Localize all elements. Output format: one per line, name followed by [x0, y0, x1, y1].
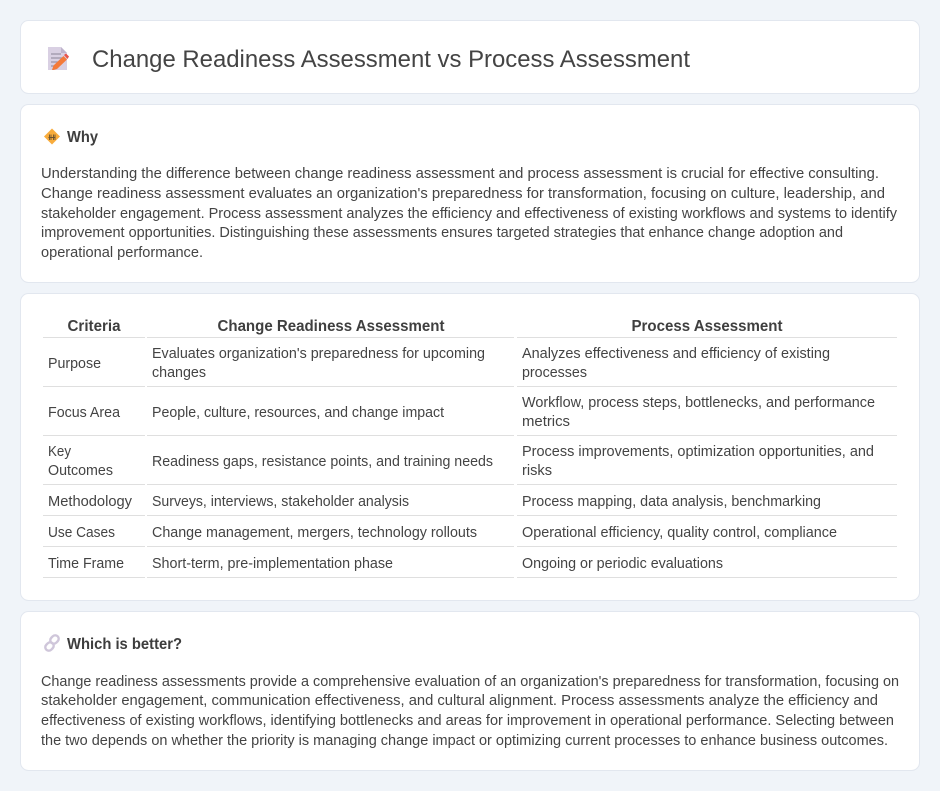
row: use cases [43, 525, 897, 547]
icon: warning diamond [44, 128, 60, 144]
row: purpose: changes [152, 365, 206, 381]
row: purpose: Purpose [48, 356, 101, 372]
row: key outcomes: Process improvements, optimization opportunities, and [522, 444, 874, 460]
table header: Change Readiness Assessment [218, 318, 444, 335]
row: time frame: Short-term, pre-implementation phase [152, 556, 393, 572]
text block: why: stakeholder engagement. Process assessment analyzes the efficiency and effectiveness of existing workflows and systems to identify [41, 206, 898, 222]
row: key outcomes [43, 444, 897, 485]
table header: Criteria [68, 318, 121, 335]
text block: which is better: stakeholder engagement, communication effectiveness, and cultural alignment. Process assessments analyze the efficiency and [41, 693, 878, 709]
row: purpose: Evaluates organization's preparedness for upcoming [152, 346, 485, 362]
row: focus area: metrics [522, 414, 570, 430]
text block: why: Understanding the difference between change readiness assessment and process assessment is crucial for effective consulting. [41, 166, 879, 182]
text block: which is better: the two depends on whether the priority is managing change impact or optimizing current processes to enhance business outcomes. [41, 733, 888, 749]
row: key outcomes: Outcomes [48, 463, 113, 479]
row: time frame [43, 556, 897, 578]
text block: why: operational performance. [41, 245, 203, 261]
row: methodology: Process mapping, data analysis, benchmarking [522, 494, 821, 510]
heading: which is better: Which is better? [67, 636, 182, 653]
text block: why [41, 166, 898, 261]
icon: chain link [44, 634, 60, 652]
panel: comparison table [20, 294, 920, 600]
icon: document with pencil [48, 47, 69, 70]
row: purpose: Analyzes effectiveness and efficiency of existing [522, 346, 830, 362]
row: key outcomes: risks [522, 463, 552, 479]
text block: why: improvement opportunities. Distinguishing these assessments ensures targeted strategies that enhance change adoption and [41, 225, 843, 241]
text block: which is better: Change readiness assessments provide a comprehensive evaluation of an organization's preparedness for transformation, focusing on [41, 674, 899, 690]
panel: why [20, 104, 920, 282]
row: use cases: Change management, mergers, technology rollouts [152, 525, 477, 541]
heading: why: Why [67, 129, 98, 146]
text block: why: Change readiness assessment evaluates an organization's preparedness for transformation, focusing on culture, leadership, and [41, 186, 885, 202]
title: Change Readiness Assessment vs Process Assessment [92, 46, 690, 73]
text block: which is better: effectiveness of existing workflows, identifying bottlenecks and areas for improvement in operational performance. Selecting between [41, 713, 894, 729]
row: methodology: Methodology [48, 494, 133, 510]
row: purpose: processes [522, 365, 587, 381]
panel: title header [20, 20, 920, 94]
row: methodology [43, 494, 897, 516]
text block: which is better [41, 674, 899, 749]
panel: which is better [20, 612, 920, 770]
table header [43, 318, 897, 338]
row: focus area: People, culture, resources, and change impact [152, 405, 444, 421]
table header: Process Assessment [632, 318, 782, 335]
row: focus area [43, 395, 897, 436]
row: methodology: Surveys, interviews, stakeholder analysis [152, 494, 409, 510]
row: focus area: Focus Area [48, 405, 120, 421]
row: time frame: Time Frame [48, 556, 124, 572]
row: key outcomes: Readiness gaps, resistance points, and training needs [152, 454, 493, 470]
row: key outcomes: Key [48, 444, 72, 460]
row: purpose [43, 346, 897, 387]
row: time frame: Ongoing or periodic evaluations [522, 556, 723, 572]
row: focus area: Workflow, process steps, bottlenecks, and performance [522, 395, 875, 411]
row: use cases: Operational efficiency, quality control, compliance [522, 525, 837, 541]
row: use cases: Use Cases [48, 525, 115, 541]
